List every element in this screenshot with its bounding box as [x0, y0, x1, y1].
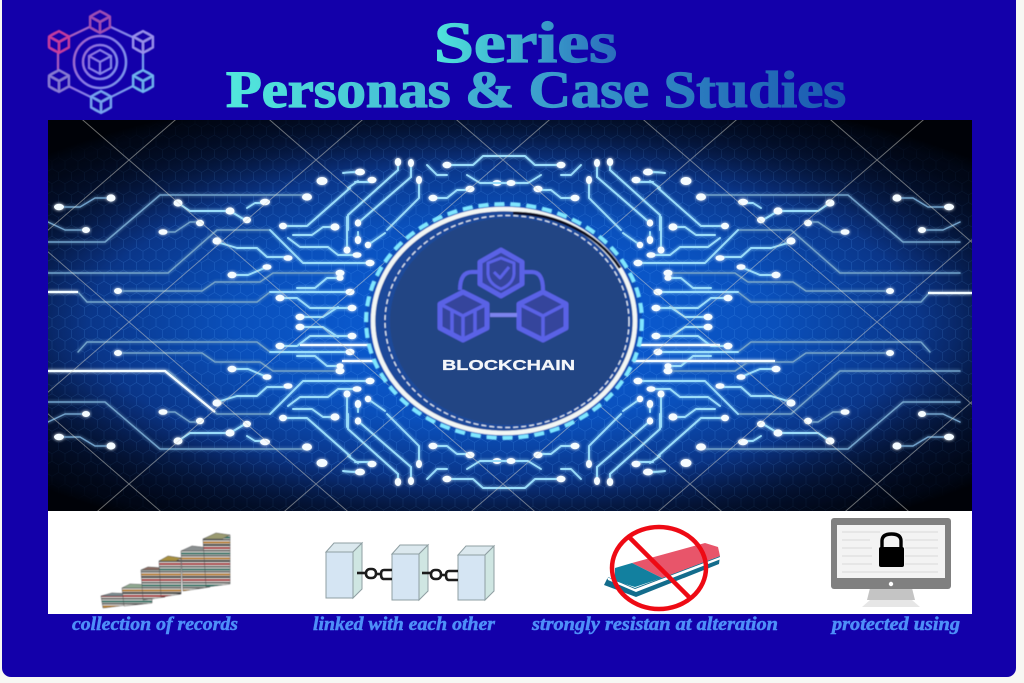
- inner dashed line: [385, 216, 629, 428]
- icon: blockchain network hexagon: [47, 11, 154, 113]
- captions under icons: collection of records: [72, 614, 238, 635]
- black ring accent: [513, 213, 620, 268]
- dashed ring: [366, 204, 642, 438]
- white ring: [373, 209, 635, 433]
- title: Series: [434, 10, 617, 75]
- captions under icons: [72, 614, 960, 635]
- captions under icons: linked with each other: [313, 614, 496, 635]
- panel: white icon strip: [48, 511, 972, 614]
- navy disc: [390, 218, 628, 425]
- icon: stacks of books: [101, 533, 230, 608]
- icon: monitor with padlock: [831, 518, 951, 607]
- captions under icons: protected using: [830, 614, 960, 635]
- label: BLOCKCHAIN: BLOCKCHAIN: [442, 357, 575, 374]
- circuit traces: [48, 156, 972, 488]
- title: Personas & Case Studies: [226, 62, 846, 119]
- captions under icons: strongly resistan at alteration: [531, 614, 778, 635]
- icon: three chained blocks: [326, 543, 494, 600]
- title: [226, 10, 846, 119]
- icon: eraser with prohibition sign: [604, 527, 721, 609]
- panel: circuit board hero image: [48, 120, 972, 511]
- center blockchain logo: [440, 250, 566, 340]
